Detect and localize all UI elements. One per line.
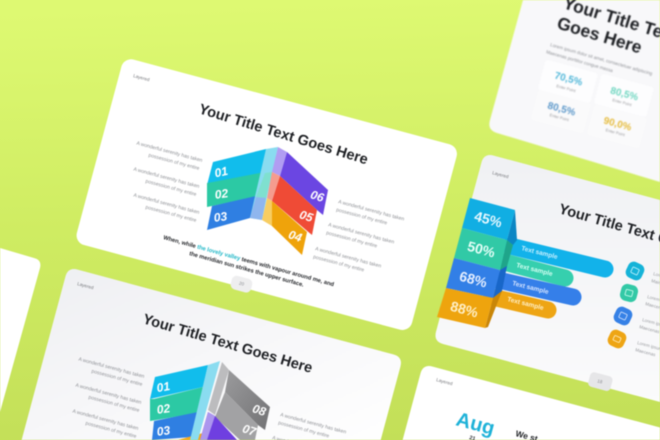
bar: 45% Text sample [510,245,605,269]
percentage labels: 68% [458,268,489,291]
panel: left edge slide [0,248,40,412]
text block: icon captions: Maecenas [639,324,660,335]
callout: bottom sentence: the meridian sun strikes the upper surface. [188,251,305,289]
text block: right captions: possession of my entire [312,254,365,274]
text block: right captions: A wonderful serenity has taken [314,246,382,270]
stat card: 80.5% blue: 80,5% [546,101,577,119]
stat card: 80.5% teal [594,74,654,117]
percentage labels: 50% [466,238,497,261]
text block: left captions: A wonderful serenity has taken [75,383,142,406]
step numbers: 08 [251,401,268,419]
heading: Aug: Aug [454,409,497,440]
text block: left captions: possession of my entire [91,369,143,388]
icon: orange badge [606,328,628,350]
bar: 68% Text sample: Text sample [512,280,550,296]
stat card: 70.5%: 70,5% [553,71,584,89]
percentage labels [449,208,504,321]
page number tab [587,371,613,392]
text block: right captions: possession of my entire [325,230,378,250]
bar: 50% Text sample: Text sample [516,262,554,278]
fold diagram: steps 01 to 08 [150,361,270,440]
step numbers: 02 [156,401,171,417]
page number tab: 20 [239,281,245,287]
text block: left captions: possession of my entire [88,395,140,414]
panel: top right slide [489,0,660,182]
label: Layered: Layered [436,377,454,386]
text block: left captions: possession of my entire [145,205,197,224]
text block: right captions: possession of my entire [335,207,388,227]
stat card: 80.5% teal: 80,5% [609,86,639,104]
text block: left captions: A wonderful serenity has taken [72,409,139,432]
step numbers: 04 [287,227,304,245]
label: Layered: Layered [77,281,95,290]
stat card: 80.5% blue: Enter Point [549,112,570,122]
text block: right captions [312,199,405,274]
step numbers: 01 [156,379,171,395]
panel: lower left slide with eight-step fold [22,269,401,440]
bar: 68% Text sample [498,280,573,297]
title: Your Title Text Goes Here [197,102,370,168]
stat card: 70.5%: Enter Point [556,83,577,93]
icon: green badge [619,283,639,303]
fold diagram: steps 01 to 06 [207,147,328,255]
bar: 50% Text sample [504,262,565,278]
step numbers [213,164,326,245]
text block: top right intro: Maecenas porttitor congue massa [546,49,614,73]
stat card: 80.5% blue [531,90,591,133]
step numbers [156,379,268,439]
text block: left captions: A wonderful serenity has taken [133,167,200,190]
stat card: 90.0%: 90,0% [602,116,633,134]
text block: icon captions: Maecenas [635,347,657,358]
icon: blue badge [612,305,634,327]
label: Layered: Layered [133,73,151,82]
text block: left captions: A wonderful serenity has taken [136,141,203,164]
stat card: 80.5% teal: Enter Point [612,97,633,107]
text block: left captions [133,141,203,224]
step numbers: 05 [298,207,315,225]
text block: left captions [72,357,145,440]
panel: bottom right slide [403,366,660,440]
text block: right captions: possession of my entire [277,420,330,440]
text block: right captions: A wonderful serenity has taken [327,222,395,246]
text block: top right intro: Lorem ipsum dolor sit amet, consectetuer adipiscing [550,42,653,76]
stat card: 90.0% [587,105,647,148]
text block: left captions: possession of my entire [145,179,197,198]
step numbers: 06 [309,187,326,205]
bar: 45% Text sample: Text sample [521,245,559,261]
step numbers: 07 [241,421,259,439]
title: Your Title Text Goes Here [141,311,314,377]
text block: left captions: possession of my entire [148,153,200,172]
label: Layered: Layered [492,170,510,179]
stat card: 70.5% [538,60,598,103]
text block: left captions: A wonderful serenity has taken [133,193,200,216]
bar: 88% Text sample [492,296,548,312]
percentage labels: 45% [473,208,504,231]
step numbers: 02 [214,186,229,202]
text block: icon captions [635,271,660,358]
percentage labels: 88% [449,298,480,321]
block chart: stacked percentage column [437,198,517,328]
icon: teal folder [624,260,646,282]
title: top right slide [555,0,660,67]
text block: right captions: A wonderful serenity has taken [337,199,405,223]
page number tab: 18 [597,378,603,385]
step numbers: 01 [213,164,229,180]
text block: right captions: A wonderful serenity has taken [279,412,347,436]
text block: left captions: A wonderful serenity has taken [78,357,145,380]
callout: bottom sentence: When, while the lovely valley teems with vapour around me, and [162,235,335,288]
page number tab [230,275,253,294]
panel: main slide with six-step fold [74,57,459,332]
title: top right slide: Goes Here [555,13,645,57]
panel: right slide with percentage bars [435,155,660,402]
step numbers: 03 [156,423,171,439]
text block: left captions: possession of my entire [85,421,137,440]
bar: 88% Text sample: Text sample [507,296,545,312]
stat card: 90.0%: Enter Point [605,127,626,137]
step numbers: 03 [213,209,228,225]
